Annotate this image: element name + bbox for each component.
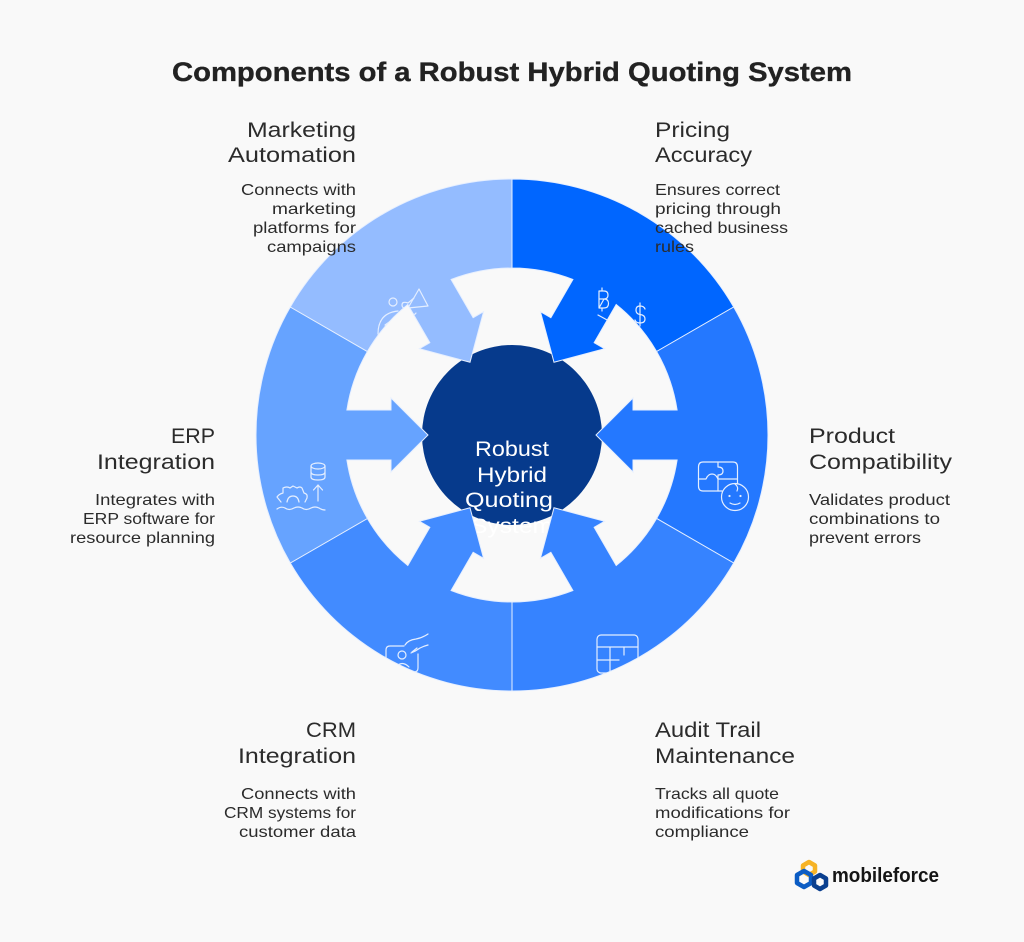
center label: Hybrid xyxy=(477,464,547,487)
label: product compatibility: combinations to xyxy=(809,511,940,528)
center label: Robust xyxy=(475,438,549,461)
icon: bitcoin and dollar exchange xyxy=(598,288,645,330)
label: CRM integration: CRM xyxy=(306,719,356,742)
label: ERP integration: Integrates with xyxy=(95,492,215,509)
icon: audit table xyxy=(597,635,638,673)
segment: CRM integration xyxy=(273,444,581,721)
label: audit trail maintenance: modifications for xyxy=(655,805,791,822)
icon: hand holding contact card xyxy=(386,634,428,672)
label: product compatibility: Compatibility xyxy=(809,451,953,474)
label: audit trail maintenance: Maintenance xyxy=(655,745,795,768)
label: pricing accuracy: cached business xyxy=(655,220,788,237)
segment: ERP integration xyxy=(256,307,428,563)
label: product compatibility: prevent errors xyxy=(809,530,921,547)
label: CRM integration: Integration xyxy=(238,745,356,768)
label: ERP integration: ERP software for xyxy=(83,511,216,528)
icon: gear, database and waves xyxy=(277,463,325,510)
icon: puzzle and face xyxy=(698,462,748,510)
label: marketing automation: Connects with xyxy=(241,182,356,199)
label: audit trail maintenance: Tracks all quote xyxy=(655,786,779,803)
segment: pricing accuracy xyxy=(443,149,751,426)
logo: mobileforce xyxy=(797,862,939,889)
label: marketing automation: marketing xyxy=(272,201,356,218)
icon: person with megaphone xyxy=(378,289,428,334)
label: product compatibility: Product xyxy=(809,425,895,448)
title: Components of a Robust Hybrid Quoting System xyxy=(172,57,852,87)
segment: marketing automation xyxy=(273,149,581,426)
segment: product compatibility xyxy=(596,307,768,563)
center circle xyxy=(422,345,602,525)
logo wordmark: mobileforce xyxy=(832,865,939,887)
label: pricing accuracy xyxy=(655,119,788,256)
label: audit trail maintenance: compliance xyxy=(655,824,749,841)
label: marketing automation xyxy=(228,119,357,256)
label: CRM integration xyxy=(224,719,357,841)
label: pricing accuracy: Accuracy xyxy=(655,144,753,167)
label: marketing automation: platforms for xyxy=(253,220,357,237)
label: product compatibility: Validates product xyxy=(809,492,951,509)
label: CRM integration: customer data xyxy=(239,824,356,841)
label: audit trail maintenance: Audit Trail xyxy=(655,719,761,742)
center label xyxy=(465,438,553,538)
center label: System xyxy=(471,515,553,538)
label: pricing accuracy: Pricing xyxy=(655,119,730,142)
label: ERP integration: resource planning xyxy=(70,530,215,547)
label: CRM integration: Connects with xyxy=(241,786,356,803)
segment: audit trail maintenance xyxy=(443,444,751,721)
center label: Quoting xyxy=(465,489,553,512)
label: ERP integration xyxy=(70,425,216,547)
label: ERP integration: Integration xyxy=(97,451,215,474)
label: product compatibility xyxy=(809,425,953,547)
label: marketing automation: Marketing xyxy=(247,119,356,142)
logo mark: linked hexagons xyxy=(797,862,826,889)
label: CRM integration: CRM systems for xyxy=(224,805,357,822)
label: marketing automation: Automation xyxy=(228,144,356,167)
label: pricing accuracy: Ensures correct xyxy=(655,182,781,199)
label: marketing automation: campaigns xyxy=(267,239,356,256)
label: pricing accuracy: pricing through xyxy=(655,201,781,218)
label: audit trail maintenance xyxy=(655,719,795,841)
label: ERP integration: ERP xyxy=(171,425,215,448)
label: pricing accuracy: rules xyxy=(655,239,694,256)
